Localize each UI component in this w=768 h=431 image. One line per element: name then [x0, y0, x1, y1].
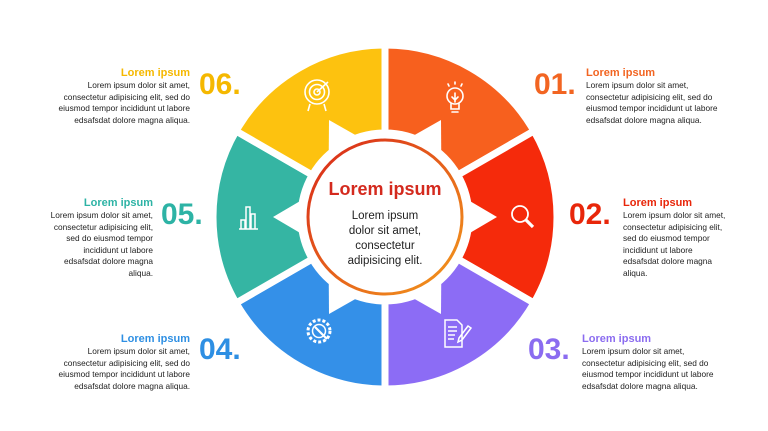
text block 02: incididunt ut labore: [623, 244, 693, 254]
text block 05: [51, 197, 153, 278]
text block 01: consectetur adipisicing elit, sed do: [586, 92, 712, 102]
text block 02: edsafsdat dolore magna: [623, 256, 712, 266]
text block 06: edsafsdat dolore magna aliqua.: [74, 114, 190, 124]
text block 04: eiusmod tempor incididunt ut labore: [59, 369, 190, 379]
text block 02: [623, 197, 725, 278]
text block 01: Lorem ipsum: [586, 67, 655, 79]
icon: document: [445, 320, 471, 347]
text block 02: Lorem ipsum: [623, 197, 692, 209]
text block 05: aliqua.: [129, 268, 153, 278]
center circle: Lorem ipsum: [328, 179, 442, 199]
text block 01: [586, 67, 718, 124]
text block 04: consectetur adipisicing elit, sed do: [64, 358, 190, 368]
text block 02: consectetur adipisicing elit,: [623, 222, 722, 232]
segment 02: [458, 131, 557, 303]
icon: bar chart: [239, 207, 258, 229]
center circle: Lorem ipsum: [352, 210, 418, 222]
segment 03: [385, 259, 534, 389]
text block 05: consectetur adipisicing elit,: [54, 222, 153, 232]
text block 03: [582, 333, 714, 390]
number 01: 01.: [534, 68, 576, 101]
icon: target: [305, 80, 329, 111]
text block 01: Lorem ipsum dolor sit amet,: [586, 80, 688, 90]
segment 04: [236, 259, 385, 389]
text block 04: Lorem ipsum: [121, 333, 190, 345]
text block 03: Lorem ipsum dolor sit amet,: [582, 346, 684, 356]
text block 06: Lorem ipsum: [121, 67, 190, 79]
text block 01: edsafsdat dolore magna aliqua.: [586, 114, 702, 124]
text block 03: edsafsdat dolore magna aliqua.: [582, 380, 698, 390]
number 02: 02.: [569, 198, 611, 231]
text block 06: Lorem ipsum dolor sit amet,: [88, 80, 190, 90]
center circle: dolor sit amet,: [349, 225, 421, 237]
number 04: 04.: [199, 333, 241, 366]
number 05: 05.: [161, 198, 203, 231]
text block 03: consectetur adipisicing elit, sed do: [582, 358, 708, 368]
text block 05: incididunt ut labore: [83, 244, 153, 254]
segment 05: [213, 131, 312, 303]
number 03: 03.: [528, 333, 570, 366]
text block 03: eiusmod tempor incididunt ut labore: [582, 369, 713, 379]
text block 01: eiusmod tempor incididunt ut labore: [586, 103, 717, 113]
number 06: 06.: [199, 68, 241, 101]
text block 05: Lorem ipsum: [84, 197, 153, 209]
text block 05: edsafsdat dolore magna: [64, 256, 153, 266]
center circle: [308, 140, 462, 294]
segment 01: [385, 45, 534, 175]
text block 06: eiusmod tempor incididunt ut labore: [59, 103, 190, 113]
text block 04: [58, 333, 190, 390]
text block 04: Lorem ipsum dolor sit amet,: [88, 346, 190, 356]
text block 05: Lorem ipsum dolor sit amet,: [51, 210, 153, 220]
text block 06: consectetur adipisicing elit, sed do: [64, 92, 190, 102]
text block 06: [58, 67, 190, 124]
text block 02: sed do eiusmod tempor: [623, 233, 710, 243]
icon: magnifier: [512, 206, 533, 227]
center circle: consectetur: [355, 240, 415, 252]
segment 06: [236, 45, 385, 175]
notches: [273, 120, 497, 314]
icon: bulb: [447, 82, 463, 112]
text block 02: aliqua.: [623, 268, 647, 278]
text block 04: edsafsdat dolore magna aliqua.: [74, 380, 190, 390]
icon: gear: [308, 320, 330, 342]
center circle: adipisicing elit.: [348, 255, 422, 267]
text block 02: Lorem ipsum dolor sit amet,: [623, 210, 725, 220]
text block 05: sed do eiusmod tempor: [66, 233, 153, 243]
text block 03: Lorem ipsum: [582, 333, 651, 345]
